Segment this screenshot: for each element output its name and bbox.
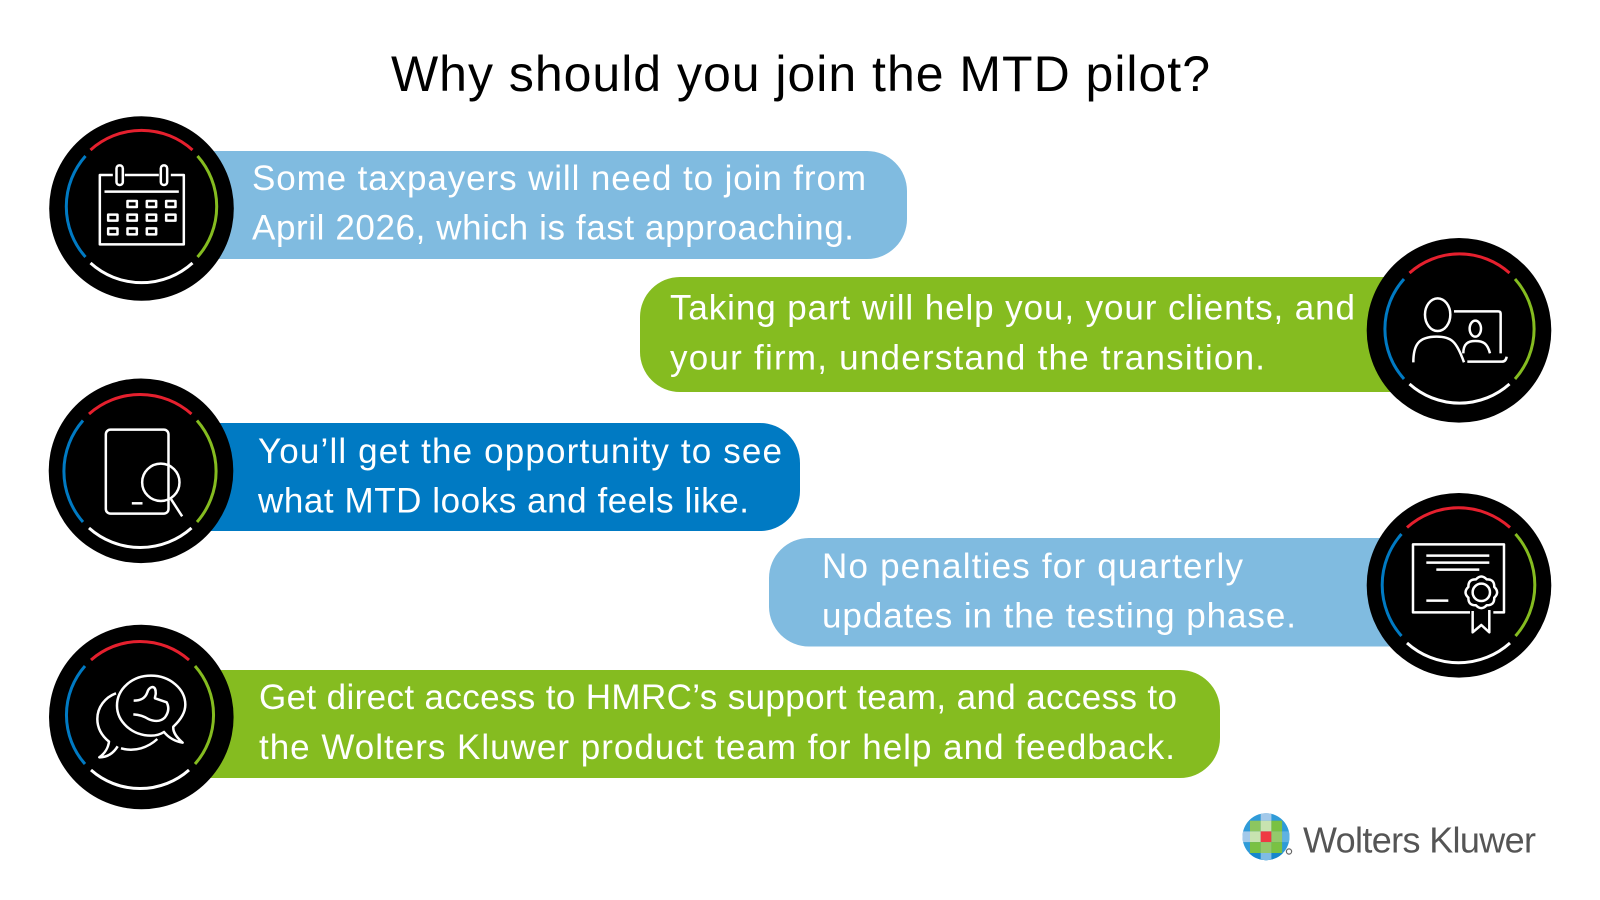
text: row 5	[259, 678, 1177, 767]
bar: row 4	[769, 538, 1420, 646]
text: row 4	[822, 547, 1296, 636]
text: row 1	[252, 159, 866, 248]
text: row 5: the Wolters Kluwer product team for help and feedback.	[259, 728, 1175, 767]
icon: presenter in ring	[1367, 238, 1551, 423]
bar: row 5	[180, 670, 1220, 778]
bar: row 2	[640, 277, 1420, 392]
text: row 3: You’ll get the opportunity to see	[258, 432, 782, 471]
logo mark	[1242, 813, 1292, 860]
bar: row 1	[180, 151, 907, 259]
text: row 4: updates in the testing phase.	[822, 596, 1296, 636]
text: row 1: Some taxpayers will need to join from	[252, 159, 866, 198]
text: row 2	[670, 288, 1355, 378]
text: row 2: Taking part will help you, your clients, and	[670, 288, 1355, 328]
icon: chat thumbs up in ring	[49, 625, 234, 809]
panel: row 4 certificate	[769, 493, 1551, 678]
icon: tablet and magnifier in ring	[49, 378, 233, 563]
title: Why should you join the MTD pilot?	[391, 46, 1210, 102]
icon: calendar in ring	[49, 116, 234, 301]
text: row 5: Get direct access to HMRC’s support team, and access to	[259, 678, 1177, 717]
logo wordmark: Wolters Kluwer	[1303, 820, 1536, 860]
icon: certificate in ring	[1367, 493, 1551, 678]
text: row 3	[257, 432, 782, 520]
text: row 1: April 2026, which is fast approaching.	[252, 208, 854, 248]
text: row 3: what MTD looks and feels like.	[257, 482, 749, 520]
panel: row 2 presenter	[640, 238, 1551, 423]
panel: row 1 calendar	[49, 116, 907, 301]
panel: row 3 document search	[49, 378, 800, 563]
logo: Wolters Kluwer	[1242, 813, 1536, 860]
panel: row 5 chat feedback	[49, 625, 1220, 809]
text: row 2: your firm, understand the transition.	[670, 338, 1265, 378]
text: row 4: No penalties for quarterly	[822, 547, 1244, 586]
bar: row 3	[180, 423, 800, 531]
